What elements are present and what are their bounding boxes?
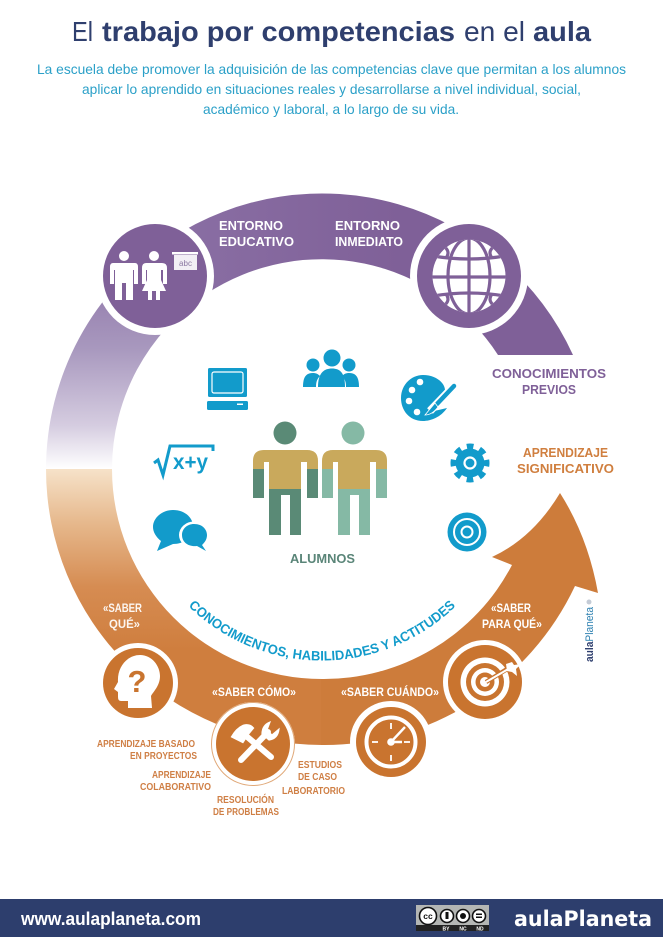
orange arc: faded left side	[46, 469, 322, 745]
label: entorno inmediato: ENTORNO	[335, 218, 400, 233]
label: entorno educativo: EDUCATIVO	[219, 234, 294, 249]
intro text: La escuela debe promover la adquisición de las competencias clave que permitan a los alumnos	[37, 61, 626, 77]
label: conocimientos previos	[492, 366, 606, 397]
label: resolución de problemas: RESOLUCIÓN	[217, 793, 274, 806]
title: trabajo por competencias	[102, 16, 455, 47]
label: aprendizaje colaborativo	[140, 770, 211, 793]
orange arrow	[321, 493, 598, 745]
purple arc: top to conocimientos previos	[170, 193, 573, 355]
curved label: conocimientos, habilidades y actitudes: CONOCIMIENTOS, HABILIDADES Y ACTITUDES	[190, 600, 454, 660]
intro text: aplicar lo aprendido en situaciones reales y desarrollarse a nivel individual, social,	[82, 81, 581, 97]
icon: speech bubbles	[153, 510, 209, 551]
icon: square root x+y	[154, 446, 213, 475]
intro text	[37, 61, 626, 117]
label: saber qué: «SABER	[103, 601, 142, 615]
label: aprendizaje significativo	[517, 445, 614, 476]
students	[253, 422, 387, 535]
label: alumnos: ALUMNOS	[290, 551, 355, 566]
label: entorno educativo: ENTORNO	[219, 218, 283, 233]
vertical logo: aulaPlaneta	[584, 606, 596, 662]
label: entorno inmediato	[335, 218, 403, 249]
label: aprendizaje colaborativo: COLABORATIVO	[140, 782, 211, 793]
icon: square root x+y: x+y	[173, 451, 208, 474]
icon: group of people	[303, 350, 359, 387]
label: resolución de problemas: DE PROBLEMAS	[213, 807, 279, 818]
title: en el	[464, 16, 525, 47]
creative commons badge: BY	[443, 926, 450, 932]
label: saber para qué	[482, 601, 542, 631]
creative commons badge: NC	[459, 926, 467, 932]
footer logo: aulaPlaneta	[514, 907, 652, 931]
icon: gear	[454, 446, 486, 480]
icon: tools	[211, 702, 295, 786]
label: saber cómo: «SABER CÓMO»	[212, 684, 296, 699]
icon: teachers circle: abc	[179, 259, 192, 268]
label: conocimientos previos: PREVIOS	[522, 382, 576, 397]
label: aprendizaje basado en proyectos: EN PROYECTOS	[130, 751, 197, 762]
label: saber cuándo: «SABER CUÁNDO»	[341, 684, 439, 699]
purple arc: faded left side	[46, 239, 206, 469]
student right	[322, 422, 387, 535]
icon: clock	[350, 701, 432, 783]
label: aprendizaje basado en proyectos: APRENDIZAJE BASADO	[97, 739, 195, 750]
icon: head with question mark: ?	[128, 664, 146, 699]
creative commons badge	[416, 905, 489, 932]
label: entorno educativo	[219, 218, 294, 249]
icon: computer	[207, 368, 248, 410]
student left	[253, 422, 318, 535]
title: aula	[533, 16, 591, 47]
icon: teachers circle	[96, 217, 214, 335]
label: saber para qué: PARA QUÉ»	[482, 616, 542, 631]
icon: globe circle	[410, 217, 528, 335]
title: El	[72, 16, 93, 47]
label: estudios de caso: DE CASO	[298, 772, 337, 783]
creative commons badge: ND	[476, 926, 484, 932]
label: laboratorio: LABORATORIO	[282, 786, 345, 797]
icon: target with arrow	[443, 640, 527, 724]
label: saber para qué: «SABER	[491, 601, 531, 615]
label: aprendizaje colaborativo: APRENDIZAJE	[152, 770, 211, 781]
intro text: académico y laboral, a lo largo de su vida.	[203, 101, 459, 117]
footer bar	[0, 899, 663, 937]
label: aprendizaje significativo: SIGNIFICATIVO	[517, 461, 614, 476]
label: saber qué: QUÉ»	[109, 616, 140, 631]
label: estudios de caso	[298, 760, 342, 783]
creative commons badge: cc	[423, 911, 433, 921]
icon: head with question mark	[98, 643, 178, 723]
footer url: www.aulaplaneta.com	[20, 909, 201, 929]
icon: blue target	[448, 512, 486, 552]
label: resolución de problemas	[213, 793, 279, 818]
label: entorno inmediato: INMEDIATO	[335, 234, 403, 249]
label: saber qué	[103, 601, 142, 631]
label: conocimientos previos: CONOCIMIENTOS	[492, 366, 606, 381]
label: aprendizaje basado en proyectos	[97, 739, 197, 762]
title	[72, 16, 591, 47]
label: estudios de caso: ESTUDIOS	[298, 760, 342, 771]
label: aprendizaje significativo: APRENDIZAJE	[523, 445, 608, 460]
icon: paint palette	[401, 375, 454, 421]
